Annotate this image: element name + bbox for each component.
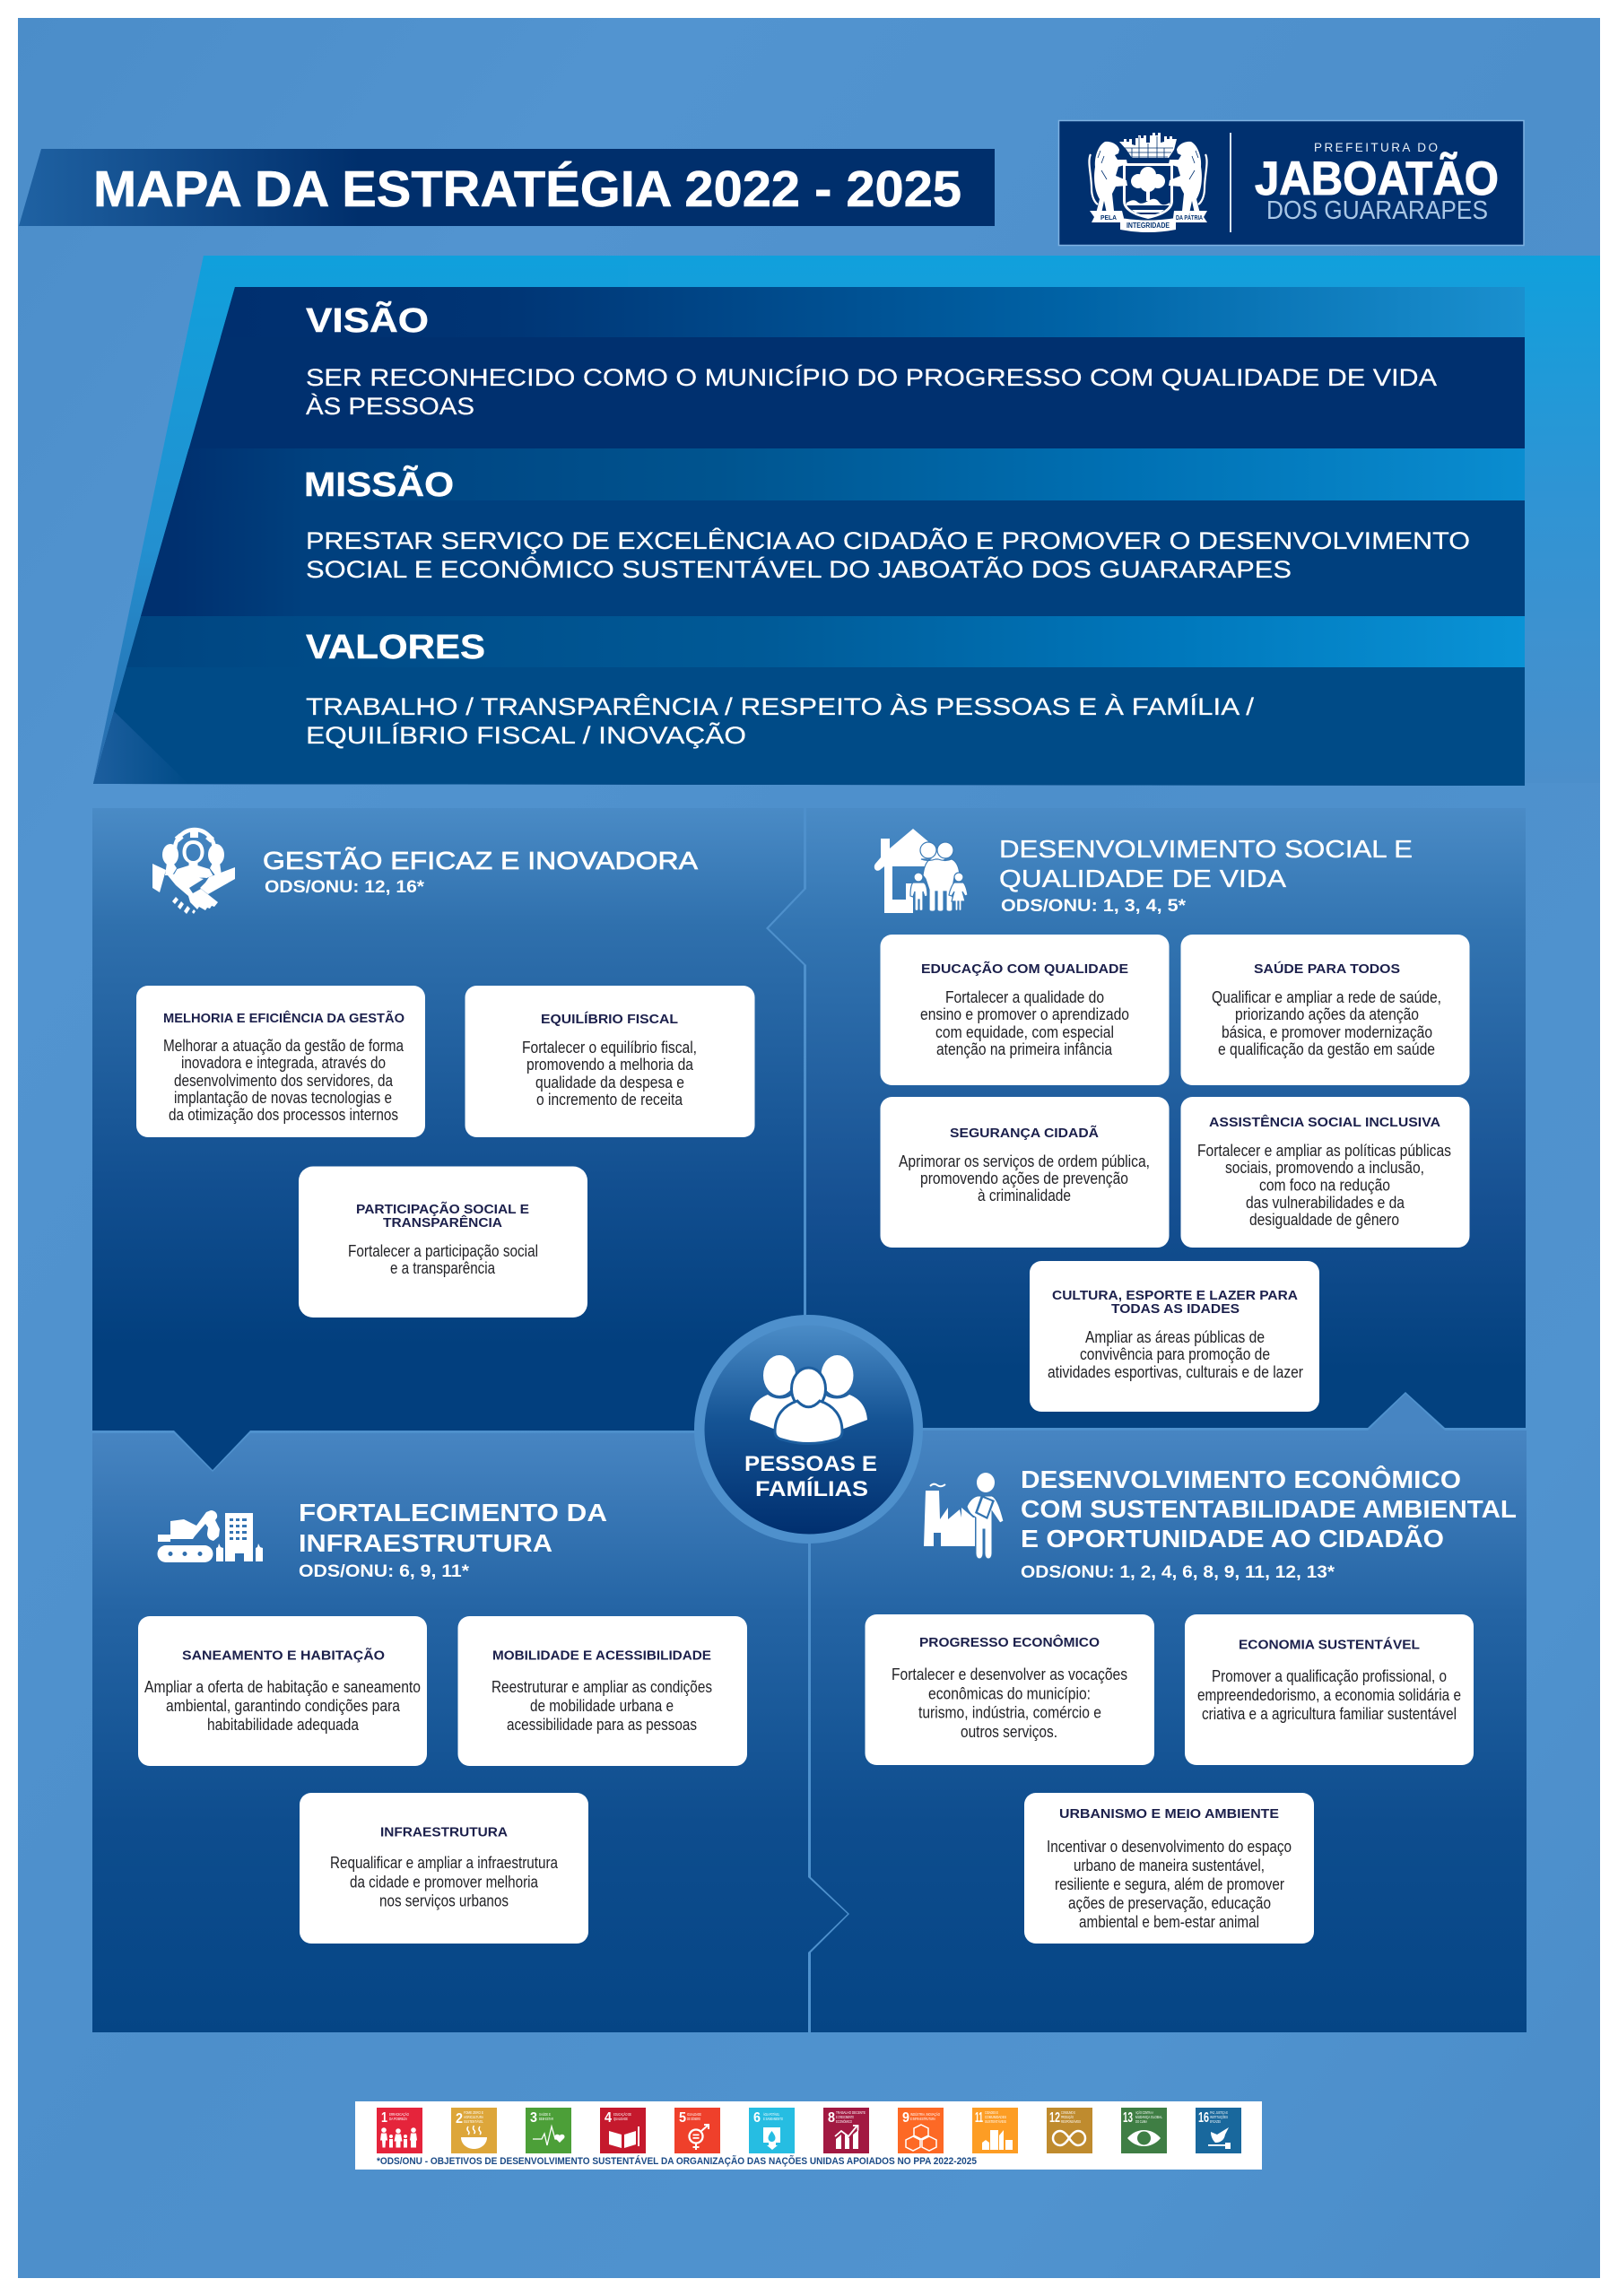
text: missão	[306, 526, 1470, 583]
logo: Prefeitura do Jaboatão dos Guararapes	[1058, 120, 1524, 246]
icon: ODS 6: 6	[753, 2110, 761, 2126]
card: melhoria e eficiência da gestão: desenvolvimento dos servidores, da	[174, 1072, 394, 1090]
panel: desenvolvimento econômico	[811, 1394, 1527, 2032]
logo divider	[1230, 133, 1231, 232]
icon: ODS 1	[377, 2108, 422, 2153]
card: infraestrutura: Requalificar e ampliar a infraestrutura	[330, 1853, 559, 1872]
card: progresso econômico: PROGRESSO ECONÔMICO	[919, 1634, 1100, 1650]
section: missão	[174, 448, 1525, 583]
panel: desenvolvimento social e qualidade de vida	[769, 808, 1526, 1428]
card: urbanismo e meio ambiente: resiliente e segura, além de promover	[1055, 1874, 1284, 1893]
card: assistência social inclusiva: sociais, promovendo a inclusão,	[1225, 1159, 1424, 1177]
card: saúde para todos: priorizando ações da atenção	[1235, 1005, 1419, 1023]
ODS list: ODS/ONU: 1, 2, 4, 6, 8, 9, 11, 12, 13*	[1021, 1562, 1335, 1582]
card: segurança cidadã: SEGURANÇA CIDADÃ	[950, 1125, 1100, 1141]
label	[744, 1452, 877, 1501]
ribbons: PELA	[1100, 215, 1117, 222]
heading	[1021, 1465, 1517, 1582]
icon: ODS 13: AÇÃO CONTRA A	[1135, 2109, 1153, 2116]
card: assistência social inclusiva: das vulnerabilidades e da	[1246, 1194, 1405, 1212]
icon: ODS 8: E CRESCIMENTO	[836, 2115, 854, 2120]
icon: ODS 5: IGUALDADE	[687, 2112, 701, 2118]
card: participação social e transparência: PARTICIPAÇÃO SOCIAL E	[356, 1201, 529, 1217]
card: educação com qualidade: ensino e promover o aprendizado	[920, 1005, 1129, 1023]
panel: visão, missão, valores	[93, 256, 1600, 786]
icon: ODS 8: 8	[828, 2110, 835, 2126]
card: equilíbrio fiscal: promovendo a melhoria da	[526, 1056, 694, 1074]
card: educação com qualidade: Fortalecer a qualidade do	[945, 988, 1104, 1006]
ribbons: INTEGRIDADE	[1127, 222, 1170, 230]
section: visão	[221, 287, 1525, 420]
panel: fortalecimento da infraestrutura	[92, 1433, 848, 2032]
icon: ODS 2: 2	[456, 2111, 463, 2126]
icon: ODS 13	[1121, 2108, 1167, 2153]
card: educação com qualidade: atenção na primeira infância	[936, 1040, 1113, 1058]
card: cultura, esporte e lazer: convivência para promoção de	[1080, 1345, 1270, 1363]
card: saúde para todos: básica, e promover modernização	[1222, 1023, 1432, 1041]
icon: ODS 16: PAZ, JUSTIÇA E	[1210, 2110, 1228, 2116]
center badge: pessoas e famílias	[694, 1315, 923, 1544]
icon: ODS 12	[1047, 2108, 1092, 2153]
ODS list: ODS/ONU: 12, 16*	[265, 877, 424, 897]
card: urbanismo e meio ambiente: urbano de maneira sustentável,	[1074, 1856, 1265, 1874]
icon: ODS 1: 1	[381, 2110, 387, 2126]
icon: ODS 9	[898, 2108, 944, 2153]
icon: ODS 11: CIDADES E	[985, 2110, 998, 2116]
heading: E OPORTUNIDADE AO CIDADÃO	[1021, 1525, 1444, 1552]
lion right	[1169, 142, 1207, 213]
card: infraestrutura	[300, 1793, 588, 1944]
text: visão: SER RECONHECIDO COMO O MUNICÍPIO DO PROGRESSO COM QUALIDADE DE VIDA	[306, 364, 1437, 391]
card: saúde para todos: SAÚDE PARA TODOS	[1254, 961, 1400, 977]
card: participação social e transparência: e a transparência	[390, 1259, 496, 1277]
card: urbanismo e meio ambiente: ações de preservação, educação	[1068, 1893, 1271, 1912]
card: melhoria e eficiência da gestão: da otimização dos processos internos	[169, 1106, 398, 1124]
heading	[999, 835, 1413, 916]
card: infraestrutura: nos serviços urbanos	[379, 1891, 509, 1910]
icon: ODS 2: SUSTENTÁVEL	[464, 2118, 483, 2125]
icon: ODS 12: 12	[1049, 2110, 1060, 2126]
icon: factory and person with tablet	[924, 1473, 1004, 1559]
card: cultura, esporte e lazer	[1030, 1261, 1319, 1412]
card: participação social e transparência	[299, 1166, 587, 1318]
icon: excavator and building	[158, 1510, 263, 1562]
text: valores: EQUILÍBRIO FISCAL / INOVAÇÃO	[306, 721, 746, 749]
icon: ODS 11: COMUNIDADES	[985, 2115, 1006, 2120]
icon: ODS 4: EDUCAÇÃO DE	[613, 2111, 631, 2118]
card: equilíbrio fiscal: o incremento de receita	[536, 1091, 683, 1109]
icon: ODS 1: DA POBREZA	[389, 2117, 408, 2122]
ODS list: ODS/ONU: 6, 9, 11*	[299, 1561, 469, 1581]
icon: house and family	[874, 829, 968, 913]
card: educação com qualidade	[881, 935, 1170, 1085]
heading: INFRAESTRUTURA	[299, 1529, 552, 1557]
card: economia sustentável: criativa e a agricultura familiar sustentável	[1202, 1704, 1457, 1723]
icon: ODS 12: CONSUMO E	[1061, 2110, 1075, 2116]
card: urbanismo e meio ambiente: Incentivar o desenvolvimento do espaço	[1047, 1837, 1292, 1856]
heading: valores: VALORES	[306, 629, 485, 666]
heading	[263, 847, 698, 897]
card: segurança cidadã	[881, 1097, 1170, 1248]
icon: ODS 3: BEM-ESTAR	[539, 2117, 553, 2122]
icon: ODS 8: ECONÔMICO	[836, 2118, 852, 2125]
footnote: *ODS/ONU - OBJETIVOS DE DESENVOLVIMENTO SUSTENTÁVEL DA ORGANIZAÇÃO DAS NAÇÕES UNIDAS APOIADOS NO PPA 2022-2025	[377, 2155, 977, 2167]
card: equilíbrio fiscal	[465, 986, 755, 1137]
card: cultura, esporte e lazer: CULTURA, ESPORTE E LAZER PARA	[1052, 1289, 1299, 1303]
icon: ODS 6: E SANEAMENTO	[763, 2117, 783, 2122]
icon: ODS 11: SUSTENTÁVEIS	[985, 2118, 1006, 2125]
logo text	[1255, 141, 1499, 225]
card: assistência social inclusiva: com foco na redução	[1259, 1177, 1390, 1195]
card: cultura, esporte e lazer: atividades esportivas, culturais e de lazer	[1048, 1363, 1303, 1381]
panel: ODS legend strip	[355, 2101, 1262, 2170]
card: saneamento e habitação: ambiental, garantindo condições para	[166, 1696, 401, 1715]
icon: gear, people and handshake	[152, 830, 235, 914]
heading: FORTALECIMENTO DA	[299, 1499, 607, 1526]
card: economia sustentável: empreendedorismo, a economia solidária e	[1197, 1685, 1461, 1704]
card: saúde para todos: Qualificar e ampliar a rede de saúde,	[1212, 988, 1441, 1006]
text: valores: TRABALHO / TRANSPARÊNCIA / RESPEITO ÀS PESSOAS E À FAMÍLIA /	[306, 692, 1255, 720]
card: assistência social inclusiva: Fortalecer e ampliar as políticas públicas	[1197, 1142, 1451, 1160]
card: participação social e transparência: Fortalecer a participação social	[348, 1242, 538, 1260]
icon: ODS 2: FOME ZERO E	[464, 2110, 483, 2116]
icon: ODS 16: 16	[1198, 2110, 1209, 2126]
icon: ODS 16: EFICAZES	[1210, 2119, 1221, 2125]
label: PESSOAS E	[744, 1452, 877, 1476]
section: valores	[126, 616, 1525, 749]
icon: ODS 2: AGRICULTURA	[464, 2115, 484, 2120]
logo text: PREFEITURA DO	[1314, 141, 1438, 154]
card: cultura, esporte e lazer: Ampliar as áreas públicas de	[1085, 1328, 1265, 1346]
icon: ODS 4	[600, 2108, 646, 2153]
icon: ODS 9: E INFRAESTRUTURA	[910, 2117, 935, 2122]
icon: ODS 6	[749, 2108, 795, 2153]
card: urbanismo e meio ambiente	[1024, 1793, 1314, 1944]
card: saneamento e habitação: Ampliar a oferta de habitação e saneamento	[144, 1677, 421, 1696]
icon: city coat of arms	[1089, 133, 1207, 232]
ribbons: DA PÁTRIA	[1176, 213, 1203, 222]
card: progresso econômico: turismo, indústria, comércio e	[918, 1702, 1101, 1722]
card: mobilidade e acessibilidade	[457, 1616, 747, 1766]
title banner	[19, 149, 995, 226]
card: assistência social inclusiva: ASSISTÊNCIA SOCIAL INCLUSIVA	[1209, 1114, 1441, 1130]
card: progresso econômico: econômicas do município:	[928, 1684, 1091, 1702]
icon: ODS 8: TRABALHO DECENTE	[836, 2110, 866, 2116]
card: assistência social inclusiva: desigualdade de gênero	[1249, 1211, 1399, 1229]
icon: ODS 13: MUDANÇA GLOBAL	[1135, 2115, 1162, 2120]
icon: ODS 11: 11	[975, 2110, 983, 2126]
ribbons	[1090, 211, 1207, 232]
icon: ODS 16: INSTITUIÇÕES	[1210, 2114, 1228, 2120]
card: economia sustentável	[1185, 1614, 1474, 1765]
text: valores	[306, 692, 1255, 749]
icon: ODS 4: QUALIDADE	[613, 2117, 628, 2122]
card: assistência social inclusiva	[1180, 1097, 1469, 1248]
heading: QUALIDADE DE VIDA	[999, 865, 1286, 892]
icon: ODS 4: 4	[605, 2110, 612, 2126]
card: melhoria e eficiência da gestão	[136, 986, 425, 1137]
card: educação com qualidade: EDUCAÇÃO COM QUALIDADE	[921, 961, 1128, 977]
card: mobilidade e acessibilidade: de mobilidade urbana e	[530, 1696, 674, 1715]
icon: ODS 5: DE GÊNERO	[687, 2115, 700, 2122]
heading	[299, 1499, 607, 1581]
card: educação com qualidade: com equidade, com especial	[935, 1023, 1114, 1041]
card: saneamento e habitação	[138, 1616, 427, 1766]
card: economia sustentável: Promover a qualificação profissional, o	[1212, 1666, 1447, 1685]
card: equilíbrio fiscal: qualidade da despesa e	[535, 1074, 684, 1091]
icon: ODS 3: SAÚDE E	[539, 2111, 551, 2118]
icon: ODS 16	[1196, 2108, 1241, 2153]
heading: DESENVOLVIMENTO ECONÔMICO	[1021, 1465, 1461, 1493]
ODS list: ODS/ONU: 1, 3, 4, 5*	[1001, 896, 1186, 916]
text: missão: SOCIAL E ECONÔMICO SUSTENTÁVEL DO JABOATÃO DOS GUARARAPES	[306, 555, 1292, 583]
icon: ODS 5	[674, 2108, 720, 2153]
card: melhoria e eficiência da gestão: inovadora e integrada, através do	[181, 1054, 386, 1072]
card: saúde para todos	[1180, 935, 1469, 1085]
card: segurança cidadã: à criminalidade	[978, 1187, 1071, 1205]
card: melhoria e eficiência da gestão: MELHORIA E EFICIÊNCIA DA GESTÃO	[163, 1010, 404, 1026]
heading: missão: MISSÃO	[304, 465, 454, 504]
logo text: DOS GUARARAPES	[1266, 196, 1488, 225]
title: MAPA DA ESTRATÉGIA 2022 - 2025	[93, 161, 961, 218]
card: progresso econômico: Fortalecer e desenvolver as vocações	[892, 1665, 1127, 1683]
panel: gestão eficaz e inovadora	[92, 808, 804, 1470]
logo text: JABOATÃO	[1255, 152, 1499, 205]
card: saneamento e habitação: SANEAMENTO E HABITAÇÃO	[182, 1647, 385, 1663]
card: progresso econômico	[865, 1614, 1154, 1765]
card: participação social e transparência: TRANSPARÊNCIA	[383, 1214, 503, 1231]
card: segurança cidadã: promovendo ações de prevenção	[920, 1170, 1128, 1187]
icon: ODS 8	[823, 2108, 869, 2153]
icon: ODS 3	[526, 2108, 571, 2153]
card: mobilidade e acessibilidade: MOBILIDADE E ACESSIBILIDADE	[492, 1648, 711, 1663]
text: visão: ÀS PESSOAS	[306, 393, 474, 420]
heading: GESTÃO EFICAZ E INOVADORA	[263, 847, 698, 874]
card: cultura, esporte e lazer: TODAS AS IDADES	[1111, 1302, 1240, 1317]
card: segurança cidadã: Aprimorar os serviços de ordem pública,	[899, 1152, 1150, 1170]
label: FAMÍLIAS	[755, 1476, 868, 1501]
icon: ODS 3: 3	[530, 2110, 537, 2126]
icon: ODS 5: 5	[679, 2110, 686, 2126]
card: melhoria e eficiência da gestão: Melhorar a atuação da gestão de forma	[163, 1037, 404, 1055]
heading: COM SUSTENTABILIDADE AMBIENTAL	[1021, 1495, 1517, 1523]
card: urbanismo e meio ambiente: URBANISMO E MEIO AMBIENTE	[1059, 1807, 1279, 1822]
icon: three people	[750, 1355, 867, 1444]
icon: ODS 12: RESPONSÁVEIS	[1061, 2118, 1081, 2125]
icon: ODS 13: DO CLIMA	[1135, 2119, 1147, 2125]
card: infraestrutura: da cidade e promover melhoria	[350, 1873, 539, 1891]
card: progresso econômico: outros serviços.	[961, 1722, 1057, 1741]
text: missão: PRESTAR SERVIÇO DE EXCELÊNCIA AO CIDADÃO E PROMOVER O DESENVOLVIMENTO	[306, 526, 1470, 554]
icon: ODS 13: 13	[1123, 2110, 1133, 2126]
icon: ODS 11	[972, 2108, 1018, 2153]
card: urbanismo e meio ambiente: ambiental e bem-estar animal	[1079, 1912, 1259, 1931]
card: melhoria e eficiência da gestão: implantação de novas tecnologias e	[174, 1089, 392, 1107]
castle crown	[1119, 133, 1177, 159]
icon: ODS 2	[451, 2108, 497, 2153]
lion left	[1089, 142, 1127, 213]
icon: ODS 9: INDÚSTRIA, INOVAÇÃO	[910, 2111, 940, 2118]
icon: ODS 12: PRODUÇÃO	[1061, 2114, 1074, 2120]
icon: ODS 1: ERRADICAÇÃO	[389, 2111, 409, 2118]
heading: DESENVOLVIMENTO SOCIAL E	[999, 835, 1413, 863]
card: equilíbrio fiscal: Fortalecer o equilíbrio fiscal,	[522, 1039, 697, 1057]
icon: ODS 9: 9	[902, 2110, 909, 2126]
card: infraestrutura: INFRAESTRUTURA	[380, 1826, 509, 1840]
text: visão	[306, 364, 1437, 420]
card: mobilidade e acessibilidade: Reestruturar e ampliar as condições	[491, 1677, 712, 1696]
heading: visão: VISÃO	[306, 300, 429, 340]
icon: ODS 6: ÁGUA POTÁVEL	[763, 2111, 779, 2118]
card: saúde para todos: e qualificação da gestão em saúde	[1218, 1040, 1435, 1058]
card: equilíbrio fiscal: EQUILÍBRIO FISCAL	[541, 1012, 678, 1027]
card: economia sustentável: ECONOMIA SUSTENTÁVEL	[1239, 1638, 1420, 1652]
card: mobilidade e acessibilidade: acessibilidade para as pessoas	[507, 1715, 697, 1734]
card: saneamento e habitação: habitabilidade adequada	[207, 1715, 360, 1734]
